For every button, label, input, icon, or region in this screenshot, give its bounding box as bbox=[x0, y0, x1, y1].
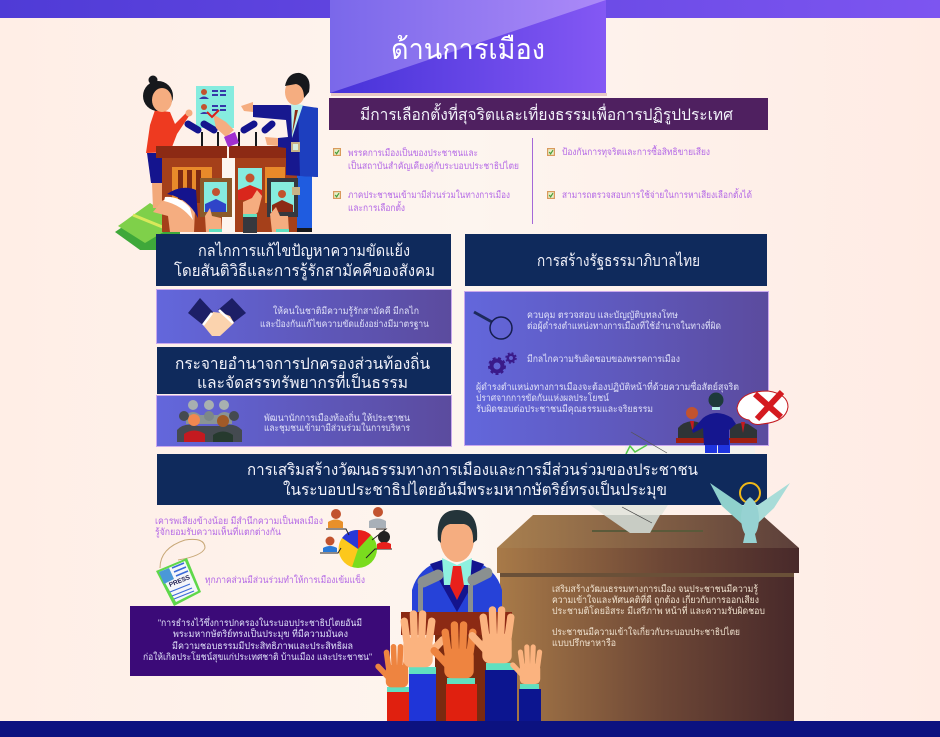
panel: governance: รับผิดชอบต่อประชาชนมีคุณธรรมและจริยธรรม bbox=[476, 403, 653, 415]
text: minority voices bbox=[155, 514, 323, 538]
candidate portraits bbox=[200, 168, 300, 217]
checklist: election items: ภาคประชาชนเข้ามามีส่วนร่วมในทางการเมือง bbox=[348, 189, 510, 201]
heading: decentralisation: และจัดสรรทรัพยากรที่เป็นธรรม bbox=[197, 371, 408, 392]
microphones bbox=[420, 585, 470, 615]
raised hands bbox=[378, 610, 541, 721]
sleeves bbox=[387, 691, 410, 721]
podium bbox=[435, 635, 490, 721]
text: minority voices: เคารพเสียงข้างน้อย มีสำนึกความเป็นพลเมือง bbox=[155, 514, 323, 527]
heading: political culture: การเสริมสร้างวัฒนธรรมทางการเมืองและการมีส่วนร่วมของประชาชน bbox=[247, 461, 698, 479]
icon: handshake bbox=[188, 298, 246, 336]
box text: ประชาชนมีความเข้าใจเกี่ยวกับระบอบประชาธิปไตย bbox=[552, 625, 740, 638]
panel: reconciliation: ให้คนในชาติมีความรู้รักสามัคคี มีกลไก bbox=[273, 305, 419, 317]
speaker head bbox=[440, 516, 474, 562]
illustration: election podium bbox=[115, 73, 318, 250]
panel: governance bbox=[464, 292, 768, 446]
heading: good governance: การสร้างรัฐธรรมาภิบาลไทย bbox=[537, 251, 700, 270]
hands bbox=[378, 647, 408, 687]
panel: governance: มีกลไกความรับผิดชอบของพรรคการเมือง bbox=[527, 353, 680, 365]
chart: opinion pie with people bbox=[320, 507, 392, 568]
illustration: officials and refusal bbox=[676, 391, 788, 453]
callout: quote bbox=[130, 606, 390, 676]
icon: gears bbox=[489, 353, 516, 374]
panel: governance: ปราศจากการขัดกันแห่งผลประโยชน์ bbox=[476, 392, 609, 404]
icon: press card bbox=[156, 539, 205, 606]
box text: เสริมสร้างวัฒนธรรมทางการเมือง จนประชาชนมีความรู้ bbox=[552, 583, 758, 595]
icon: woman candidate bbox=[143, 76, 192, 208]
callout: quote: พระมหากษัตริย์ทรงเป็นประมุข ที่มีความมั่นคง bbox=[173, 627, 348, 640]
voters' hands bbox=[205, 190, 289, 233]
icon: ballot paper bbox=[196, 86, 234, 128]
heading: decentralisation: กระจายอำนาจการปกครองส่วนท้องถิ่น bbox=[175, 352, 430, 373]
standing speaker bbox=[692, 392, 736, 453]
box text bbox=[552, 583, 765, 649]
heading: fair elections bbox=[329, 98, 768, 130]
callout: quote: ก่อให้เกิดประโยชน์สุขแก่ประเทศชาติ บ้านเมือง และประชาชน" bbox=[143, 651, 372, 663]
heading: decentralisation bbox=[157, 347, 451, 394]
illustration: ballot box bbox=[497, 505, 799, 721]
heading: good governance bbox=[465, 234, 767, 286]
seated officials bbox=[676, 407, 757, 443]
callout: quote: มีความชอบธรรมมีประสิทธิภาพและประสิทธิผล bbox=[172, 640, 353, 652]
checklist: election items bbox=[333, 138, 752, 224]
icon: money bbox=[115, 203, 180, 250]
icon: press card: PRESS bbox=[168, 574, 192, 589]
panel: local politicians bbox=[156, 396, 452, 446]
illustration: speaker at podium bbox=[401, 510, 512, 721]
panel: governance: ควบคุม ตรวจสอบ และบัญญัติบทลงโทษ bbox=[527, 309, 678, 321]
bottom bar bbox=[0, 721, 940, 737]
box text: แบบปรึกษาหารือ bbox=[552, 638, 616, 649]
heading: fair elections: มีการเลือกตั้งที่สุจริตและเที่ยงธรรมเพื่อการปฏิรูปประเทศ bbox=[360, 103, 733, 125]
panel: reconciliation: และป้องกันแก้ไขความขัดแย้งอย่างมีมาตรฐาน bbox=[260, 318, 429, 330]
icon: man candidate bbox=[241, 73, 318, 232]
icon: magnifier bbox=[474, 312, 512, 339]
box text: ความเข้าใจและทัศนคติที่ดี ถูกต้อง เกี่ยวกับการออกเสียง bbox=[552, 593, 759, 606]
icon: dove with halo bbox=[710, 483, 790, 543]
panel: governance: ต่อผู้ดำรงตำแหน่งทางการเมืองที่ใช้อำนาจในทางที่ผิด bbox=[527, 319, 721, 332]
title block bbox=[330, 0, 607, 96]
panel: reconciliation bbox=[156, 290, 452, 344]
text: minority voices: รู้จักยอมรับความเห็นที่แตกต่างกัน bbox=[155, 525, 281, 538]
heading: political culture: ในระบอบประชาธิปไตยอันมีพระมหากษัตริย์ทรงเป็นประมุข bbox=[283, 479, 667, 500]
panel: local politicians: และชุมชนเข้ามามีส่วนร่วมในการบริหาร bbox=[264, 422, 410, 434]
heading: conflict resolution bbox=[156, 234, 451, 286]
box lid top bbox=[497, 515, 799, 548]
speech bubble with cross bbox=[737, 391, 788, 424]
icon: voting hand bbox=[207, 110, 239, 147]
box lid front bbox=[497, 548, 799, 573]
ballot paper bbox=[590, 505, 668, 533]
panel: local politicians: พัฒนานักการเมืองท้องถิ่น ให้ประชาชน bbox=[264, 411, 410, 424]
speaker suit bbox=[412, 560, 502, 615]
checklist: election items: สามารถตรวจสอบการใช้จ่ายในการหาเสียงเลือกตั้งได้ bbox=[562, 188, 752, 201]
heading: conflict resolution: โดยสันติวิธีและการรู้รักสามัคคีของสังคม bbox=[174, 261, 435, 281]
checklist: election items: และการเลือกตั้ง bbox=[348, 201, 405, 214]
bent-over person bbox=[153, 188, 198, 232]
podium bbox=[156, 146, 301, 232]
checklist: election items: เป็นสถาบันสำคัญเคียงคู่กับระบอบประชาธิปไตย bbox=[348, 159, 519, 172]
title: ด้านการเมือง bbox=[391, 34, 545, 66]
panel: governance: ผู้ดำรงตำแหน่งทางการเมืองจะต้องปฏิบัติหน้าที่ด้วยความซื่อสัตย์สุจริต bbox=[476, 380, 739, 393]
checklist: election items: ป้องกันการทุจริตและการซื้อสิทธิขายเสียง bbox=[562, 145, 710, 158]
text: all sectors: ทุกภาคส่วนมีส่วนร่วมทำให้การเมืองเข้มแข็ง bbox=[205, 573, 365, 586]
heading: conflict resolution: กลไกการแก้ไขปัญหาความขัดแย้ง bbox=[198, 241, 410, 260]
box body bbox=[500, 573, 794, 721]
checklist: election items: พรรคการเมืองเป็นของประชาชนและ bbox=[348, 146, 478, 159]
top bar bbox=[0, 0, 940, 18]
icon: crowd bbox=[177, 400, 242, 442]
microphones bbox=[188, 124, 272, 146]
box text: ประชามติโดยอิสระ มีเสรีภาพ หน้าที่ และความรับผิดชอบ bbox=[552, 604, 765, 617]
icon: check mark behind panel bbox=[625, 432, 755, 454]
heading: political culture bbox=[157, 454, 767, 505]
callout: quote: "การธำรงไว้ซึ่งการปกครองในระบอบประชาธิปไตยอันมี bbox=[158, 616, 362, 629]
